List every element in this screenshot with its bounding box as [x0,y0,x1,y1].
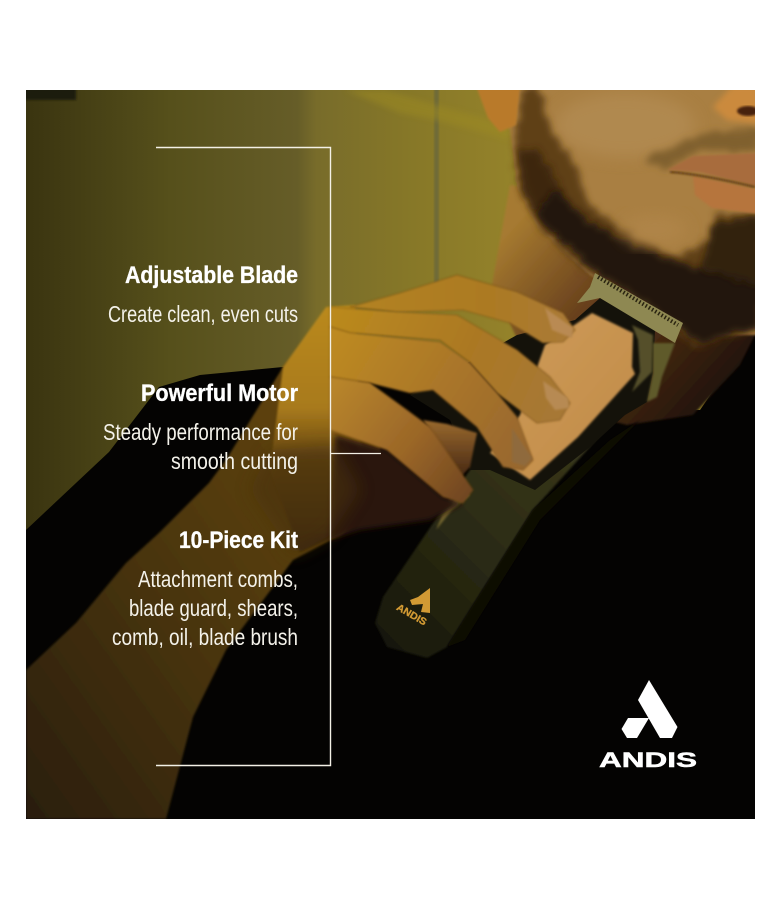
lips [667,153,760,214]
middle nail [543,381,569,410]
feature: adjustable blade [108,262,298,327]
small logo mark [410,588,430,613]
body highlight [436,494,470,529]
chin patch [616,226,663,254]
ring nail [512,428,532,466]
description: smooth cutting [171,448,298,474]
feature: powerful motor [103,380,298,474]
index nail [545,308,573,338]
ring finger [330,327,533,470]
hand [270,275,575,552]
mustache [645,128,760,170]
description: Attachment combs, [138,566,298,592]
description: comb, oil, blade brush [112,624,298,650]
clipper lower body [375,443,594,658]
beard [514,85,760,345]
mirror frame [434,88,439,288]
housing edge sheen [632,325,653,392]
clipper side shadow [447,420,640,647]
description: Create clean, even cuts [108,301,298,327]
small logo text: ANDIS [394,602,429,628]
lower lip [694,178,755,214]
index finger [350,275,575,343]
little finger [330,377,473,503]
description [103,419,298,474]
right beard shadow [700,218,760,285]
dark spot on wall [26,90,78,101]
back of hand [272,304,360,552]
mouth line [670,172,755,187]
neck [492,185,755,425]
logo mark [622,680,678,738]
ear [476,86,520,132]
logo wordmark: ANDIS [599,749,697,772]
palm [330,435,463,540]
upper lip [671,154,755,186]
wall background [26,90,712,530]
Andis logo [599,680,697,772]
lower sideburn shadow [514,147,564,227]
middle finger [330,307,570,423]
bracket tick [330,452,381,454]
thumb [423,420,477,482]
jaw shadow [535,190,760,342]
forearm [26,320,380,819]
small logo [396,588,430,625]
gold plate [490,313,635,480]
nose [713,90,755,126]
wall highlight [356,90,450,121]
description: blade guard, shears, [129,595,298,621]
description [112,566,298,650]
cheek highlight [560,96,690,154]
heading: Adjustable Blade [125,262,298,289]
side metal [647,343,675,402]
clipper upper housing [410,298,655,490]
black shirt [26,330,755,819]
sideburn and outer beard [514,85,760,345]
heading: Powerful Motor [141,380,298,407]
photo: man trimming beard [20,80,760,819]
wrist shading [250,445,360,555]
blade head [577,273,683,343]
nostril [737,106,759,116]
heading: 10-Piece Kit [179,527,298,554]
feature: 10-piece kit [112,527,298,650]
face [510,90,755,336]
blade teeth [598,277,678,325]
bracket frame [156,148,330,766]
description: Steady performance for [103,419,298,445]
clipper [375,273,683,658]
